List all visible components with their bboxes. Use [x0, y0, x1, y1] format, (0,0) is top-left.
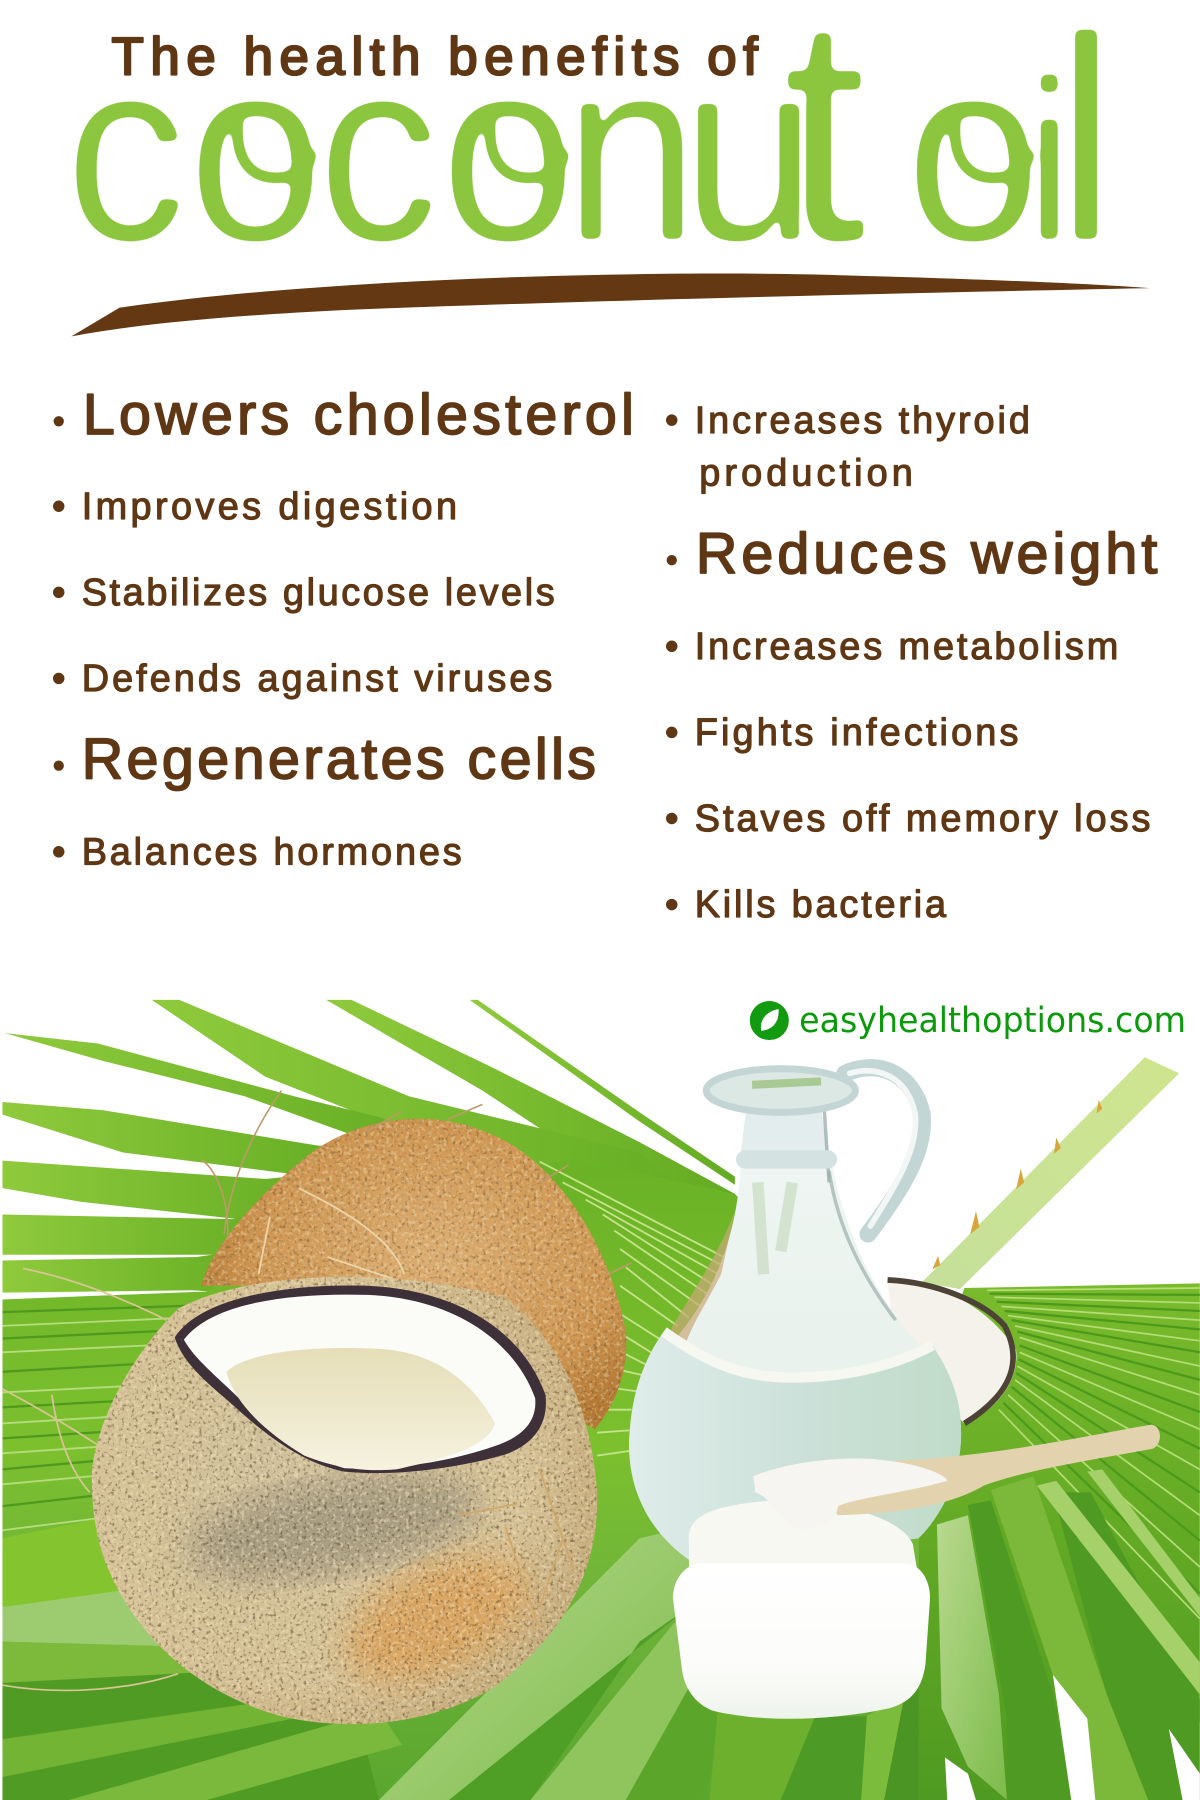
benefits list: left column: Lowers cholesterol [83, 383, 634, 447]
bottle handle [845, 1068, 922, 1234]
oil level [629, 1332, 961, 1567]
title: coconut oil: o [188, 6, 324, 296]
benefits list: left column: Stabilizes glucose levels [82, 572, 555, 614]
title: coconut oil: u [681, 6, 817, 296]
bottle body glass [629, 1165, 961, 1567]
benefits list: left column: Improves digestion [82, 486, 457, 528]
benefits list: right column: Reduces weight [696, 522, 1157, 586]
title: coconut oil: o [440, 6, 576, 296]
benefits list: left column: Balances hormones [82, 831, 462, 873]
palm frond: lower right blades [937, 1469, 1200, 1800]
palm frond: lower centre blades [379, 1527, 947, 1800]
brown swoosh underline [71, 274, 1149, 336]
title: coconut oil: o [906, 6, 1041, 296]
palm frond: right fan [919, 1283, 1200, 1800]
bottle lip [706, 1069, 855, 1112]
title: coconut oil: i [1025, 33, 1073, 289]
title: coconut oil: c [65, 6, 187, 296]
back coconut [201, 1091, 632, 1429]
photo: palm leaf with coconuts, oil bottle and jar [2, 1000, 1200, 1800]
benefits list: right column: production [699, 453, 913, 495]
benefits list: right column: Kills bacteria [695, 884, 947, 926]
wooden spoon with solid oil [753, 1425, 1160, 1529]
coconut rim and flesh [175, 1285, 546, 1473]
palm frond: centre pleats [540, 1162, 735, 1456]
website address: easyhealthoptions.com [799, 1001, 1186, 1041]
palm stem with thorns [922, 1057, 1179, 1289]
benefits list: left column [53, 383, 634, 873]
palm frond: lower left bands [2, 1515, 402, 1800]
title: coconut oil [65, 0, 1116, 309]
half coconut behind the bottle [888, 1280, 1016, 1423]
bottle neck and collar [741, 1108, 829, 1154]
front coconut with opening [2, 1268, 597, 1724]
title: coconut oil: n [563, 6, 699, 296]
palm frond: upper left blades [2, 1000, 735, 1295]
benefits list: right column [666, 400, 1157, 926]
benefits list: right column: Increases thyroid [695, 400, 1030, 442]
glass bottle with oil [629, 1068, 961, 1567]
jar of coconut oil [673, 1500, 930, 1719]
benefits list: left column: Defends against viruses [82, 658, 552, 700]
palm frond: solid left and centre area [2, 1159, 919, 1800]
benefits list: right column: Staves off memory loss [695, 798, 1150, 840]
benefits list: right column: Increases metabolism [695, 626, 1118, 668]
subtitle: The health benefits of [112, 28, 758, 87]
title: coconut oil: c [317, 6, 439, 296]
benefits list: right column: Fights infections [695, 712, 1018, 754]
coconut water [226, 1348, 495, 1470]
benefits list: left column: Regenerates cells [82, 727, 596, 791]
logo: leaf badge [750, 1001, 789, 1040]
palm frond: right fan ribs [987, 1288, 1200, 1619]
